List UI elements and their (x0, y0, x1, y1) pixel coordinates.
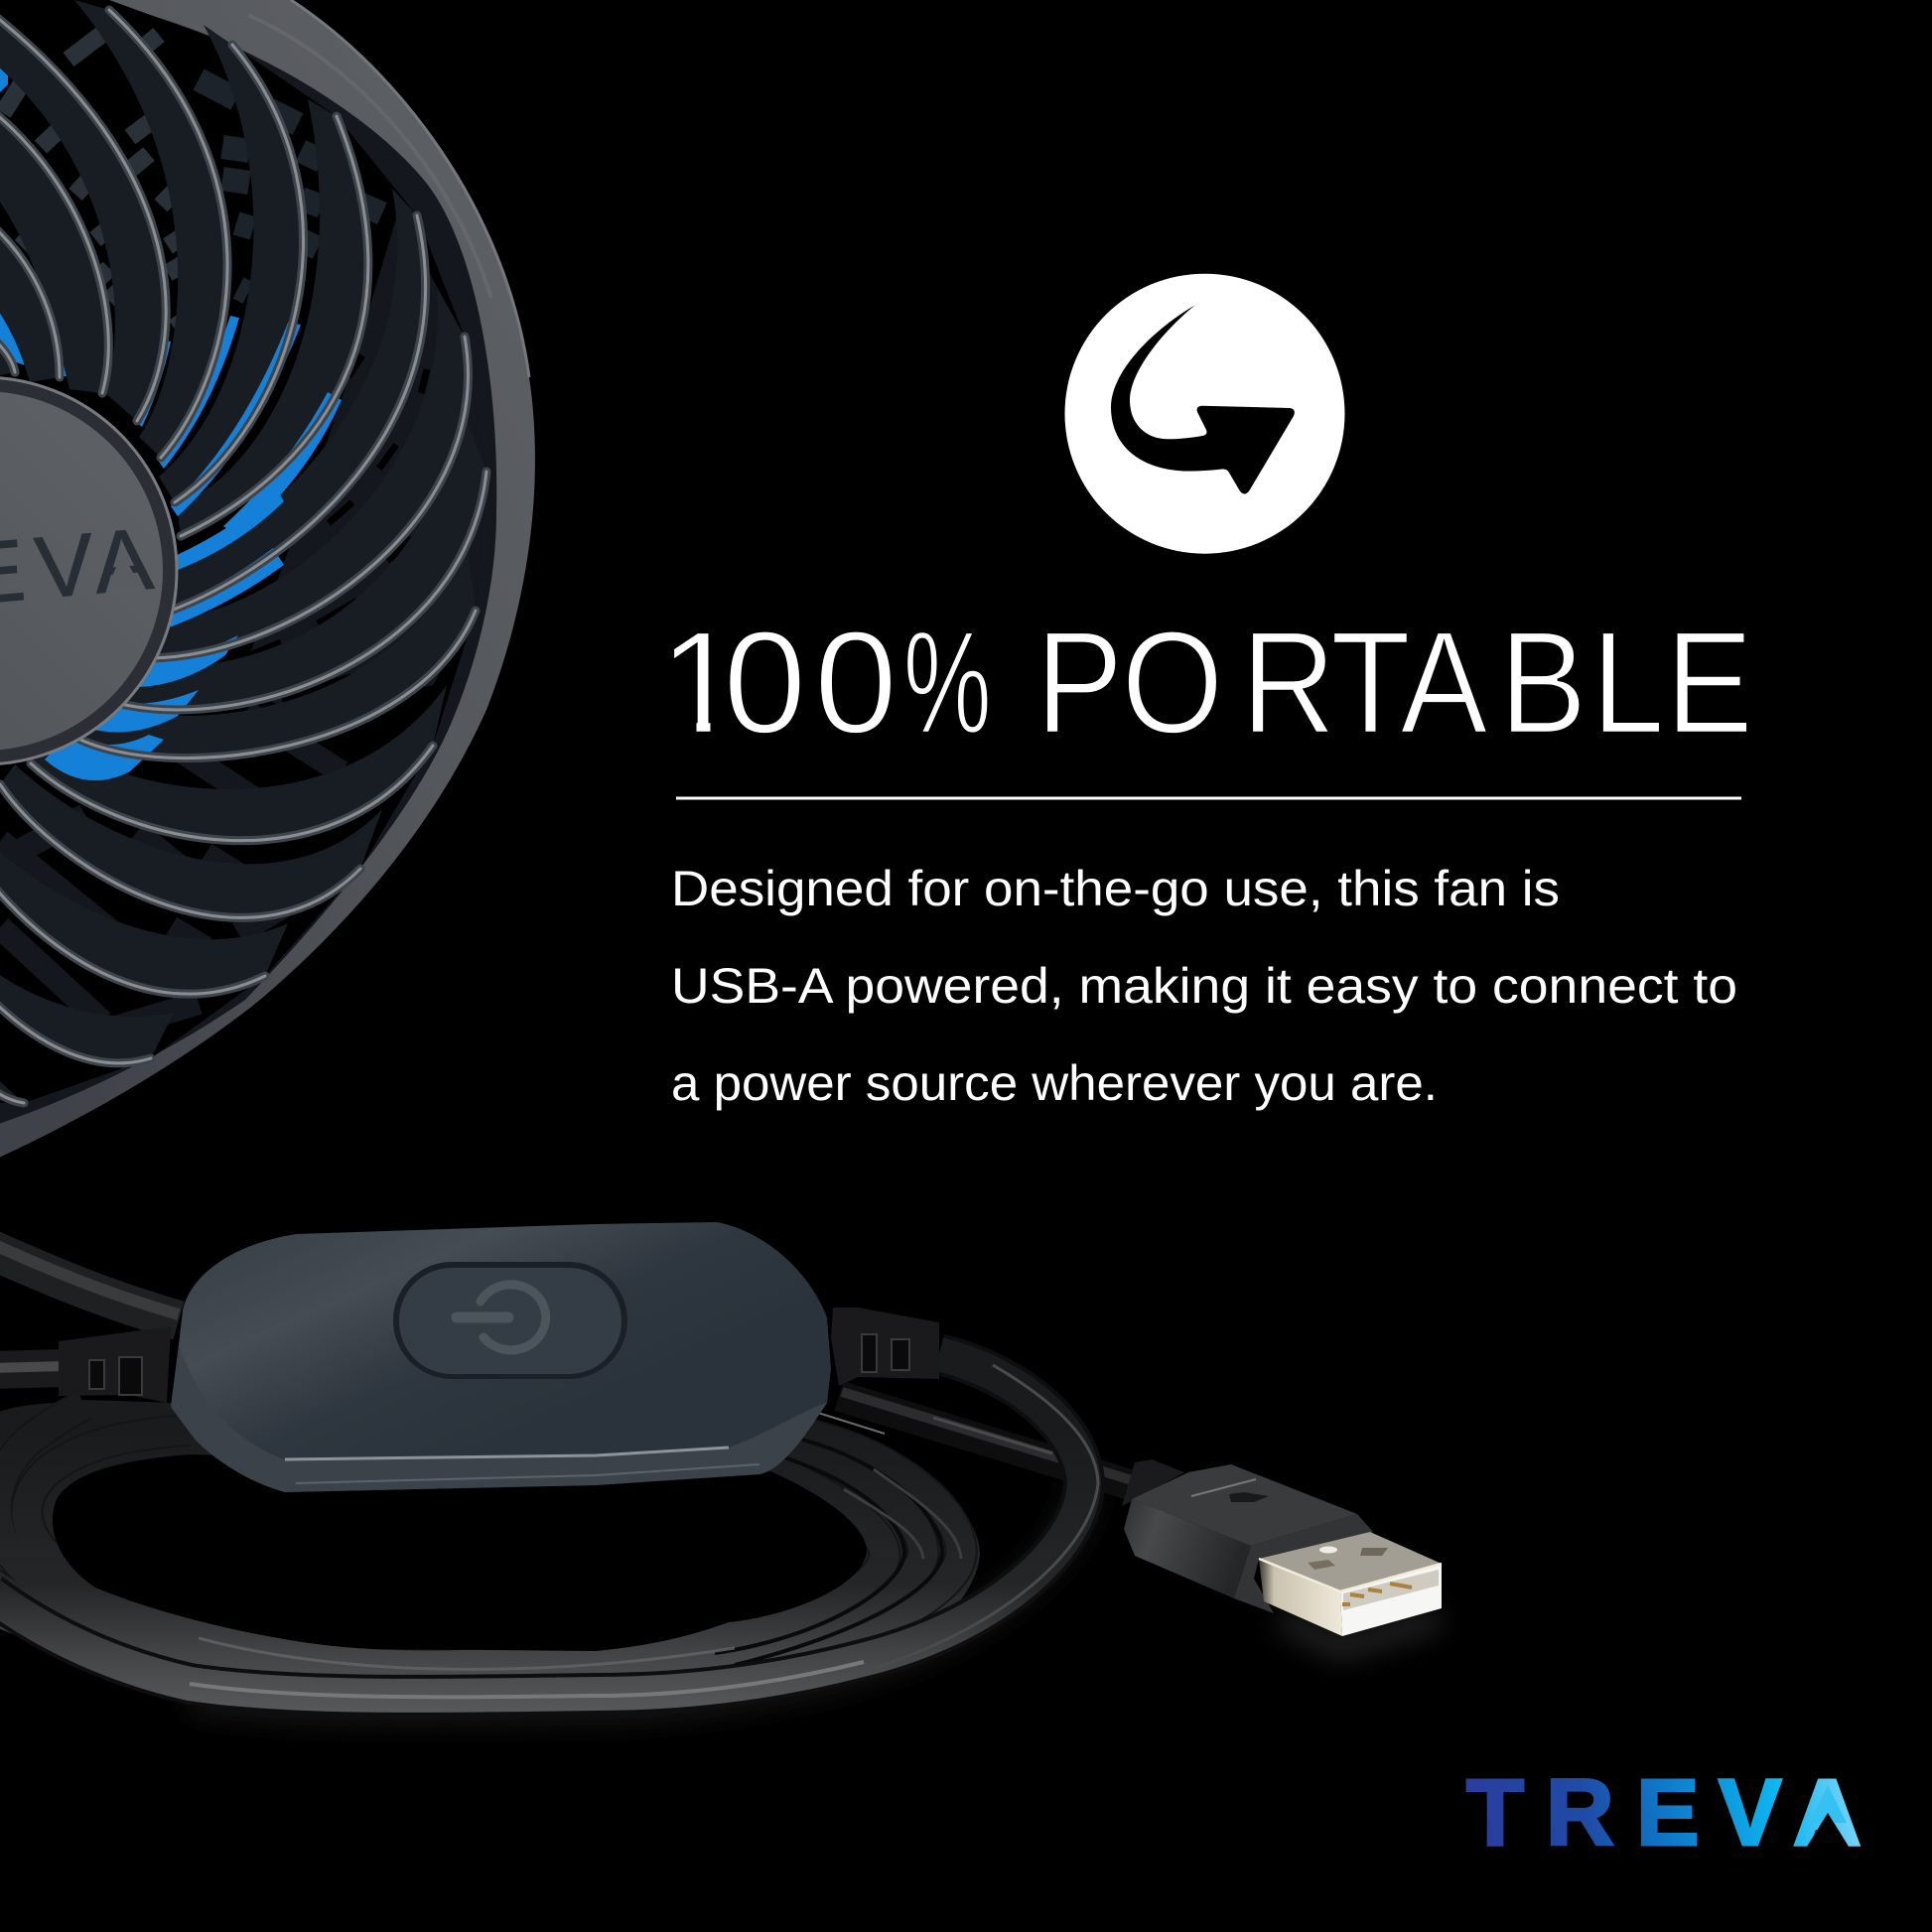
fan hub with brand name (0, 377, 177, 764)
power button (393, 1262, 627, 1379)
body copy: Designed for on-the-go use, this fan is (671, 861, 1560, 916)
USB-A plug (1122, 1459, 1442, 1636)
rear cable to plug (818, 1392, 1132, 1485)
plug neck (1122, 1459, 1184, 1506)
body copy (671, 861, 1737, 1111)
outer cable loop (0, 1354, 1098, 1697)
inner coil opening (53, 1454, 867, 1651)
body copy: a power source wherever you are. (671, 1055, 1438, 1111)
spiral grille ribs (0, 0, 486, 1103)
heading: % (903, 601, 992, 764)
left cables (0, 1243, 179, 1370)
body copy: USB-A powered, making it easy to connect to (671, 958, 1737, 1014)
icon: power symbol (457, 1285, 546, 1350)
metal connector (1259, 1532, 1442, 1636)
TREVA logo: TREVA (1466, 1760, 1862, 1865)
plug housing (1132, 1464, 1357, 1546)
coiled cable loops (0, 1405, 961, 1695)
inline switch body (171, 1222, 831, 1492)
blue blade strips between ribs (45, 316, 342, 780)
fan product (0, 0, 535, 1162)
coil bundle base (0, 1400, 980, 1714)
heading: PORTABLE (1035, 601, 1753, 764)
rear grille (0, 0, 486, 1103)
USB cable and inline switch (0, 1222, 1442, 1714)
heading: 1 (658, 601, 743, 764)
strain reliefs (59, 1308, 939, 1403)
upper grille slats (3, 25, 189, 343)
blue fan blades behind grille (0, 38, 69, 376)
cable separations and highlights (199, 1440, 961, 1669)
heading (650, 601, 1753, 764)
black vent slits (226, 355, 427, 703)
soft glow behind cable (190, 1483, 1440, 1710)
heading: 00 (723, 601, 897, 764)
icon: portable arrow badge (1064, 274, 1344, 554)
right sector backing (238, 215, 486, 715)
fan outer ring (0, 0, 535, 1162)
lower grille slats (0, 712, 342, 1033)
